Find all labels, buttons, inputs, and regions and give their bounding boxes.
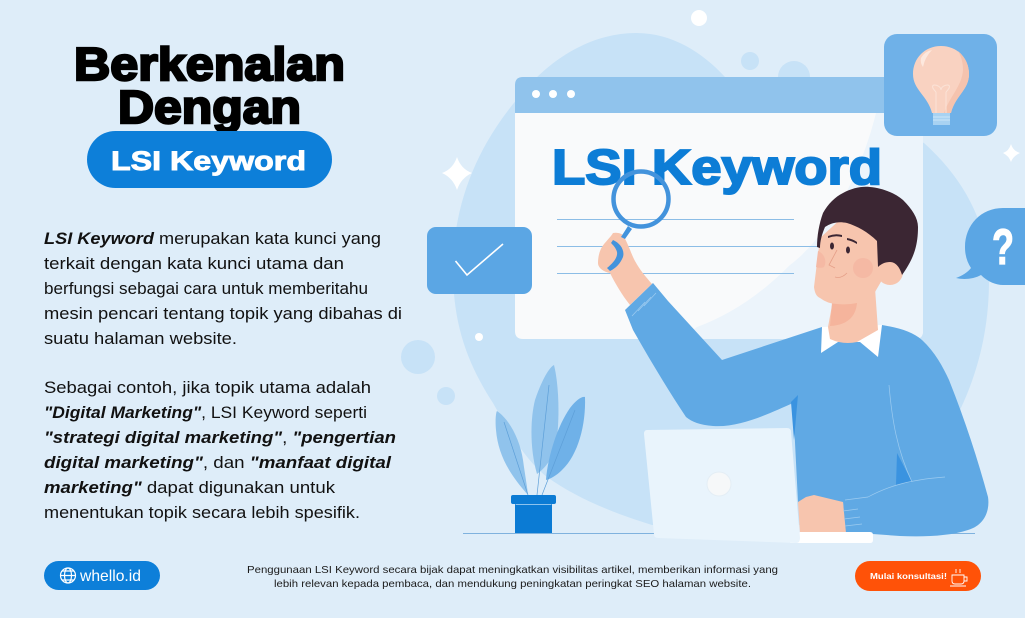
paragraph: example: "Digital Marketing" , LSI Keyword seperti xyxy=(44,404,367,422)
decorative circles xyxy=(401,10,810,405)
paragraph: definition: mesin pencari tentang topik yang dibahas di xyxy=(44,305,402,323)
consult button: Mulai konsultasi! xyxy=(870,571,947,581)
sweater xyxy=(625,283,988,536)
sweater fold shadows xyxy=(791,395,912,485)
website pill: whello.id xyxy=(79,568,141,585)
magnifier xyxy=(607,172,668,271)
footer note: Penggunaan LSI Keyword secara bijak dapat meningkatkan visibilitas artikel, memberikan informasi yang xyxy=(247,564,778,576)
icon: question speech bubble: ? xyxy=(992,219,1014,275)
window heading: LSI Keyword xyxy=(552,141,882,195)
icon: sparkle left xyxy=(442,157,472,190)
paragraph: definition: LSI Keyword merupakan kata kunci yang xyxy=(44,230,381,248)
paragraph: example: "strategi digital marketing" , "pengertian xyxy=(44,429,396,447)
title: Berkenalan xyxy=(74,38,345,90)
nose and mouth xyxy=(829,250,847,278)
paragraph: example: digital marketing" , dan "manfaat digital xyxy=(44,454,391,472)
website pill xyxy=(44,561,160,590)
paragraph: definition: berfungsi sebagai cara untuk memberitahu xyxy=(44,280,368,298)
plant in pot xyxy=(496,365,585,534)
footer note: lebih relevan kepada pembaca, dan mendukung peningkatan peringkat SEO halaman website. xyxy=(274,578,751,590)
icon: question speech bubble xyxy=(956,208,1025,285)
title xyxy=(74,38,345,133)
title: Dengan xyxy=(118,81,301,133)
paragraph: definition xyxy=(44,230,402,348)
background blob xyxy=(453,33,989,525)
title pill: LSI Keyword: LSI Keyword xyxy=(111,146,306,176)
lower hand xyxy=(798,495,846,533)
neck xyxy=(828,288,878,343)
eyes and brows xyxy=(828,234,857,254)
browser window xyxy=(515,77,923,339)
title pill: LSI Keyword xyxy=(87,131,332,188)
laptop xyxy=(644,428,873,543)
ear xyxy=(877,259,903,285)
paragraph: example: menentukan topik secara lebih spesifik. xyxy=(44,504,360,522)
icon: coffee cup xyxy=(950,569,967,586)
person xyxy=(598,172,988,536)
paragraph: definition: terkait dengan kata kunci utama dan xyxy=(44,255,344,273)
paragraph: example: marketing" dapat digunakan untuk xyxy=(44,479,336,497)
hair xyxy=(817,187,918,275)
paragraph: example: Sebagai contoh, jika topik utama adalah xyxy=(44,379,371,397)
floor line xyxy=(463,532,975,534)
cheeks xyxy=(816,251,873,278)
icon: globe xyxy=(60,568,76,583)
icon: light bulb card xyxy=(884,34,997,136)
neck shadow xyxy=(830,303,857,326)
paragraph: definition: suatu halaman website. xyxy=(44,330,237,348)
raised hand xyxy=(598,233,652,305)
footer note xyxy=(247,564,778,590)
sweater seam lines xyxy=(632,293,945,526)
icon: checkmark card xyxy=(427,227,532,294)
consult button xyxy=(855,561,981,591)
paragraph: example xyxy=(44,379,396,522)
icon: sparkle right xyxy=(1003,144,1020,162)
shirt collar xyxy=(821,325,882,357)
face xyxy=(814,215,882,304)
